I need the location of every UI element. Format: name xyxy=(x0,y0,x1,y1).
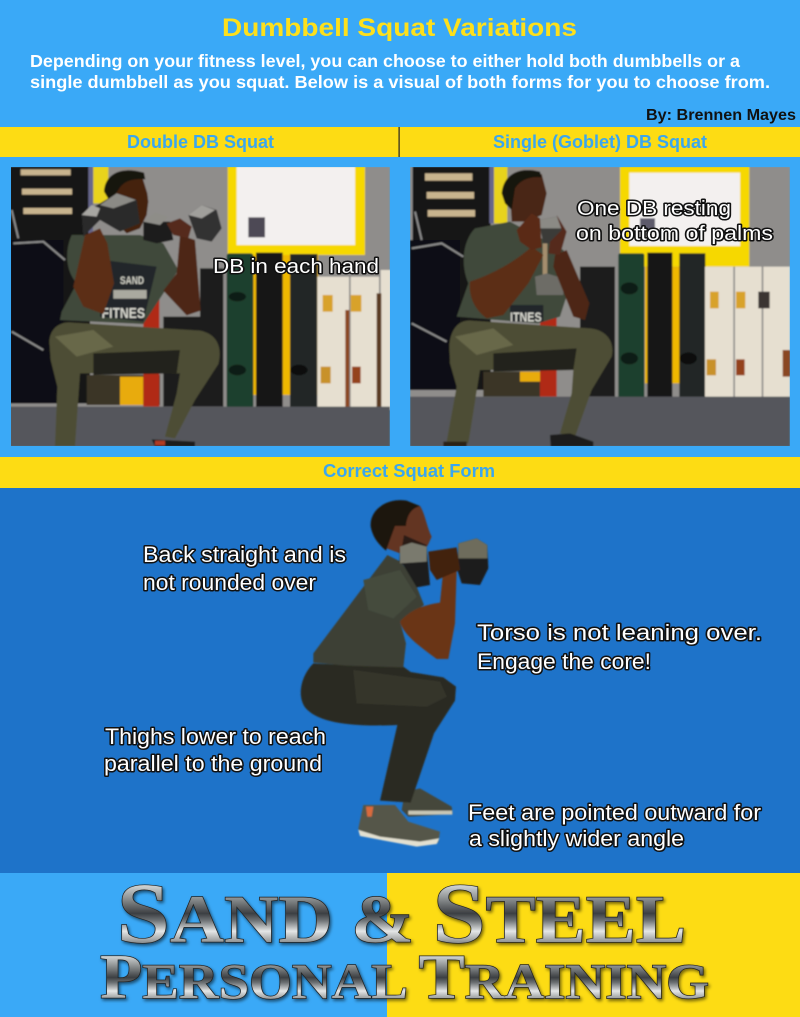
callout: thighs parallel xyxy=(104,724,326,776)
callout: thighs parallel: parallel to the ground xyxy=(104,751,322,776)
photo: single goblet DB squat xyxy=(410,167,790,447)
head xyxy=(114,178,149,234)
pants xyxy=(301,663,456,803)
shirt xyxy=(60,235,178,324)
logo: Sand & Steel Personal Training xyxy=(100,865,709,1012)
figure: side-view squat with dumbbells xyxy=(301,500,488,847)
heading: double DB squat: Double DB Squat xyxy=(127,131,274,152)
intro paragraph: Depending on your fitness level, you can choose to either hold both dumbbells or a xyxy=(30,51,740,71)
intro paragraph xyxy=(30,51,770,92)
photo: single goblet DB squat: ITNES xyxy=(510,309,542,324)
callout: DB in each hand: DB in each hand xyxy=(213,255,379,278)
callout: back straight xyxy=(143,542,346,595)
head xyxy=(510,174,547,222)
back shoe xyxy=(402,788,453,817)
logo: Sand & Steel Personal Training: SAND & STEEL xyxy=(117,865,686,961)
shoe xyxy=(152,439,195,447)
header background xyxy=(0,0,800,457)
intro paragraph: single dumbbell as you squat. Below is a visual of both forms for you to choose from. xyxy=(30,72,770,92)
callout: torso not leaning: Torso is not leaning over. xyxy=(477,620,762,645)
heading: correct squat form: Correct Squat Form xyxy=(323,460,495,481)
pants xyxy=(49,322,220,446)
shoes xyxy=(550,433,593,447)
callout: feet outward xyxy=(468,800,762,851)
right arm xyxy=(163,235,201,315)
callout: one DB resting on bottom of palms: on bottom of palms xyxy=(576,222,773,245)
callout: torso not leaning xyxy=(477,620,762,674)
callout: one DB resting on bottom of palms: One DB resting xyxy=(577,197,731,220)
shirt xyxy=(313,555,424,667)
callout: back straight: Back straight and is xyxy=(143,542,346,567)
front shoe xyxy=(358,805,440,846)
left arm xyxy=(73,228,114,314)
photo: double DB squat: FITNES xyxy=(102,306,145,322)
heading: single goblet DB squat: Single (Goblet) DB Squat xyxy=(493,131,707,152)
dumbbell xyxy=(543,243,547,277)
photo: double DB squat: SAND xyxy=(120,275,144,287)
callout: one DB resting on bottom of palms xyxy=(576,197,773,245)
hands xyxy=(428,547,460,580)
near dumbbell head xyxy=(399,543,430,587)
yellow heading band: correct squat form xyxy=(0,457,800,488)
arms xyxy=(470,247,543,318)
panel: correct squat form xyxy=(0,488,800,873)
byline: By: Brennen Mayes xyxy=(646,107,796,124)
far dumbbell head xyxy=(457,538,488,585)
photo: double DB squat xyxy=(10,167,391,447)
footer banner xyxy=(0,865,800,1017)
callout: thighs parallel: Thighs lower to reach xyxy=(105,724,326,749)
yellow heading band xyxy=(0,127,800,157)
title: Dumbbell Squat Variations xyxy=(222,14,577,42)
arm xyxy=(400,570,457,659)
shirt xyxy=(457,222,575,323)
logo: Sand & Steel Personal Training: PERSONAL TRAINING xyxy=(100,942,709,1012)
callout: back straight: not rounded over xyxy=(143,570,317,595)
face and hair xyxy=(384,506,432,553)
callout: feet outward: a slightly wider angle xyxy=(469,826,684,851)
dumbbells xyxy=(82,193,140,237)
pants xyxy=(447,321,612,443)
callout: feet outward: Feet are pointed outward for xyxy=(468,800,762,825)
callout: torso not leaning: Engage the core! xyxy=(477,649,651,674)
